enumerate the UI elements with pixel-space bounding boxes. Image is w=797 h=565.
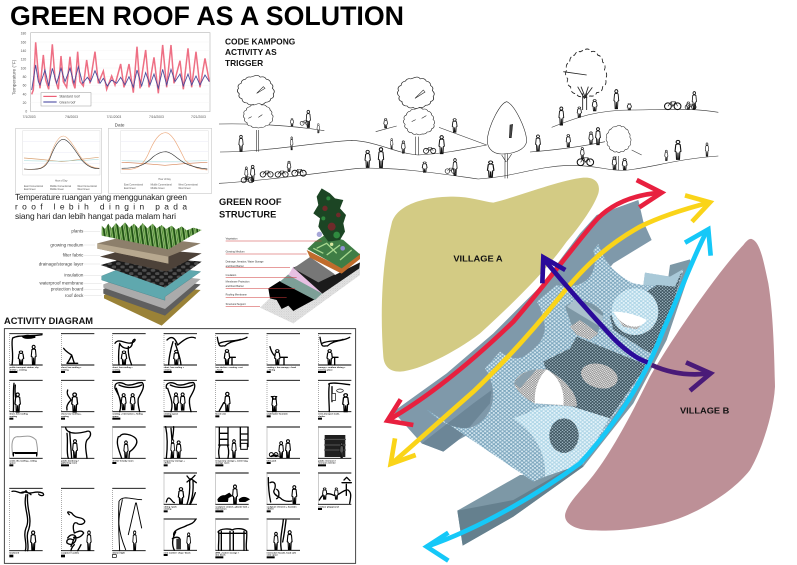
village B [565,239,775,531]
green roof structure labels: Structural Support [226,303,246,306]
roofing membrane [268,281,317,311]
line chart: standard vs green roof temperature: 180 [21,32,26,36]
activity cell 25: sitting / park [164,505,177,508]
mesh: flange top right [643,269,683,287]
activity cell 1 [9,333,43,373]
arrow: red [387,180,662,425]
activity cell 12: kiosk seat [215,413,226,416]
activity cell 27 [267,473,300,512]
activity cell 2: short, low roofing + [61,366,82,369]
activity cell 5: low shelter + seating + eat [215,366,243,369]
green roof cross section [260,188,360,323]
activity cell 14 [318,380,351,420]
activity cell 31: seat space [267,554,279,557]
green roof layer labels: drainage/storage layer [39,261,84,266]
structure: beam lower flange [422,390,492,452]
activity cell 23 [61,488,94,557]
activity cell 26: interaction [215,508,227,511]
village B label: VILLAGE B [680,406,729,416]
activity cell 15: under-the-roofing + sitting [9,459,37,462]
activity cell 19: temporary storage + meter bag, [215,459,248,462]
activity cell 8: seating [9,415,18,418]
green roof layer labels: protection board [51,287,84,292]
activity cell 10: space [112,416,119,418]
activity diagram panel [4,329,356,563]
activity cell 6: + dining [267,369,276,371]
landscape section sketch [219,49,718,183]
line chart: heat flux small left: Middle Conventional [50,185,72,188]
line chart: heat flux small left: West Green [77,188,90,191]
activity cell 3: seating [112,368,121,371]
activity cell 1: shelter + seating [9,368,27,371]
hill lines [219,109,718,183]
line chart: heat flux small right: East Conventional [124,184,143,187]
heading: activity diagram: ACTIVITY DIAGRAM [4,316,93,326]
heading: code kampong: CODE KAMPONG [225,36,295,46]
tree [313,188,346,242]
tree 5 [606,125,631,170]
people [239,90,709,181]
activity cell 31: interactive facade, food cafe [267,551,297,554]
structure leader lines [226,241,322,306]
groundcover plants [307,235,360,268]
activity cell 25: seating [164,508,172,511]
activity cell 20: bike park [267,460,277,462]
line chart: standard vs green roof temperature: 140 [21,49,26,53]
activity cell 29 [164,519,197,556]
line chart: heat flux small right: East Green [124,187,136,190]
green roof structure labels: Insulation [226,274,237,277]
activity cell 16: gathering room [61,462,77,465]
activity cell 16 [61,427,94,466]
activity cell 28: outdoor playground [318,505,339,508]
line chart: heat flux small left: Middle Green [50,188,65,191]
heading: code kampong: TRIGGER [225,58,263,68]
title: GREEN ROOF AS A SOLUTION [10,1,404,31]
activity cell 24: vibrant light [112,552,125,555]
mesh: dark panel [543,337,647,418]
green roof layer labels: filter fabric [63,253,84,258]
activity cell 9 [61,380,94,420]
layer: growing medium [97,235,201,264]
structure: mesh canopy [427,244,683,482]
activity cell 18: temporary storage + [164,459,185,462]
activity cell 29: mini market / shop / kiosk [164,551,191,554]
green roof layer labels [39,228,102,298]
activity cell 6 [267,333,300,373]
activity cell 2 [61,333,94,373]
structure: lower beam [457,259,692,546]
growing medium [307,250,360,274]
line chart: heat flux small right: West Conventional [178,184,198,187]
layer: waterproof membrane [103,272,201,309]
activity cell 30: atm kiosk [215,554,226,557]
activity cell 30 [215,519,249,558]
layer: plants [102,222,202,249]
activity cell 5: + food [215,369,223,371]
activity cell 15: space [9,463,16,465]
line chart: heat flux small left: East Conventional [24,185,43,188]
line chart: heat flux small right: Middle Green [151,187,165,190]
structure: lower beam side [457,462,583,546]
activity cell 8 [9,380,43,420]
bicycles [241,102,696,183]
activity cell 10 [112,380,146,420]
line chart: standard vs green roof temperature: Standard roof [59,95,80,99]
activity cell 10: seating + interaction + hiding [112,413,143,416]
layer: insulation [102,263,201,300]
line chart: standard vs green roof temperature: 20 [23,101,27,105]
activity cell 18: shelter [164,462,171,465]
tree 4 [563,49,607,110]
green roof structure labels: Membrane Protection [226,281,250,284]
line chart: standard vs green roof temperature: 120 [21,58,26,62]
arrow: purple [652,362,711,391]
temperature charts [12,32,212,193]
activity cell 13: underwater fountain [267,413,288,416]
activity cell 17 [112,427,146,464]
line chart: standard vs green roof temperature: 7/11/2003 [107,115,121,119]
line chart: standard vs green roof temperature: 160 [21,40,26,44]
activity cell 21 [318,427,351,466]
activity cell 3: short, low roofing + [112,366,133,369]
arrow: blue [542,257,648,362]
green roof layer labels: insulation [64,273,84,278]
activity cell 22 [9,488,44,557]
activity cell 9: seating [61,415,69,418]
activity cell 25 [164,473,197,512]
line chart: standard vs green roof temperature: Date [115,122,125,127]
arrow: cyan [427,229,711,561]
tree 3 [487,102,527,178]
activity cell 7 [318,333,351,373]
line chart: standard vs green roof temperature: 0 [25,110,27,114]
heading: green roof structure: STRUCTURE [219,210,276,220]
activity cell 4: short, low roofing + [164,366,185,369]
activity cell 12 [215,380,249,417]
heading: code kampong: ACTIVITY AS [225,47,277,57]
activity cell 14: semi-transport node, [318,413,340,416]
village A label: VILLAGE A [453,254,503,264]
activity cell 17: shelter & baby room [112,459,134,462]
text block: temperature note: siang hari dan lebih hangat pada malam hari [15,211,176,221]
activity cell 28 [318,473,351,510]
line chart: standard vs green roof temperature: 7/6/2003 [65,115,78,119]
activity cell 30: ATM + locker storage / [215,551,239,554]
activity cell 21: restroom interior [318,462,336,465]
line chart: heat flux small right [108,128,212,193]
activity cell 8: short, low roofing [9,413,28,416]
line chart: standard vs green roof temperature: 40 [23,92,27,96]
structure: upper beam [393,200,652,452]
green roof structure labels: Growing Medium [226,251,244,254]
activity cell 19 [215,427,249,466]
activity cell 3 [112,333,146,373]
structural support [260,268,360,323]
line chart: standard vs green roof temperature: Temperature (°F) [12,59,17,95]
mesh opening: center [565,298,603,340]
activity cell 5 [215,333,249,373]
line chart: standard vs green roof temperature [12,32,210,127]
mesh opening: large white [514,369,577,407]
green roof structure labels: and Root Barrier [226,285,244,288]
activity cell 27: sculpture element + fountain [267,505,297,508]
activity cell 2: seating [61,368,69,371]
line chart: heat flux small left: Hour of Day [55,179,68,182]
green roof structure labels: Vegetation [226,238,238,241]
activity cell 18 [164,427,197,466]
activity cell 23: sculpture / public [61,552,80,555]
activity cell 16: public bandung / [61,460,79,462]
mesh: lighter lower band [513,406,610,477]
drainage [293,262,360,294]
site diagram [382,178,775,561]
activity cell 27: shelter [267,508,274,511]
line chart: heat flux small right: Middle Conventional [151,184,172,187]
line chart: heat flux small left [16,128,102,193]
layer: roof deck [104,283,201,326]
activity cell 20 [267,427,300,464]
activity cell 26: sculpture seated + planter bed + [215,505,250,508]
activity cell 4: seating [164,368,172,371]
activity cell 26 [215,473,250,512]
line chart: heat flux small right: Hour of Day [158,178,172,181]
line chart: heat flux small left: West Conventional [77,185,97,188]
activity cell 7: canopy + outdoor dining + [318,366,346,369]
text block: temperature note: Temperature ruangan yang menggunakan green [15,192,187,202]
activity cell 15 [9,427,43,466]
green roof structure labels: and Root Barrier [226,265,244,268]
activity cell 7: meeting place [318,368,333,371]
line chart: standard vs green roof temperature: Green roof [59,100,75,104]
exploded green roof layers [97,222,202,326]
green roof structure labels [226,238,264,306]
mesh: dark upper right [610,273,682,353]
line chart: standard vs green roof temperature: 80 [23,75,27,79]
layer: filter fabric [100,248,202,272]
arrow: yellow [391,195,710,464]
layer: drainage [101,256,202,288]
activity cell 14: shelter [318,415,325,418]
green roof layer labels: plants [71,228,84,233]
green roof structure labels: Drainage, Aeration, Water Storage [226,261,264,264]
heading: code kampong [225,36,295,68]
activity cell 19: storage room [215,462,229,465]
green roof structure labels: Roofing Membrane [226,294,247,297]
line chart: standard vs green roof temperature: 7/16/2003 [149,115,164,119]
line chart: standard vs green roof temperature: 100 [21,66,26,70]
insulation [288,267,328,294]
activity cell 11: seating space [164,413,179,416]
activity cell 22: landmark [9,553,20,555]
activity cell 24 [112,488,146,557]
mesh opening: dome [612,288,658,335]
tree 2 [397,77,435,155]
mesh opening: white ellipse [578,360,620,392]
activity cell 4 [164,333,197,373]
line chart: standard vs green roof temperature: 60 [23,84,27,88]
layer: protection board [103,277,201,316]
line chart: heat flux small right: West Green [178,187,191,190]
village A [382,178,599,372]
line chart: standard vs green roof temperature: 7/21/2003 [191,115,206,119]
mesh opening: lower dark circle [549,418,579,453]
heading: green roof structure: GREEN ROOF [219,197,282,207]
activity cell 1: public transport station, sky [9,366,39,369]
text block: temperature note: roof lebih dingin pada [15,202,187,212]
tree 1 [237,75,274,152]
text block: temperature note [15,192,187,221]
activity cell 13 [267,380,300,417]
barrier [293,257,335,282]
membrane protection [280,274,322,300]
green roof layer labels: roof deck [65,293,84,298]
activity cell 21: public restroom / [318,459,336,462]
activity cell 11 [164,380,197,417]
activity cell 31 [267,519,300,558]
heading: green roof structure [219,197,282,220]
activity cell 9: short, low roofing + [61,413,82,416]
green roof layer labels: waterproof membrane [39,280,84,285]
line chart: heat flux small left: East Green [24,188,36,191]
green roof layer labels: growing medium [50,242,84,247]
activity cell 6: seating + low canopy + food [267,366,297,369]
line chart: standard vs green roof temperature: 7/1/2003 [23,115,36,119]
